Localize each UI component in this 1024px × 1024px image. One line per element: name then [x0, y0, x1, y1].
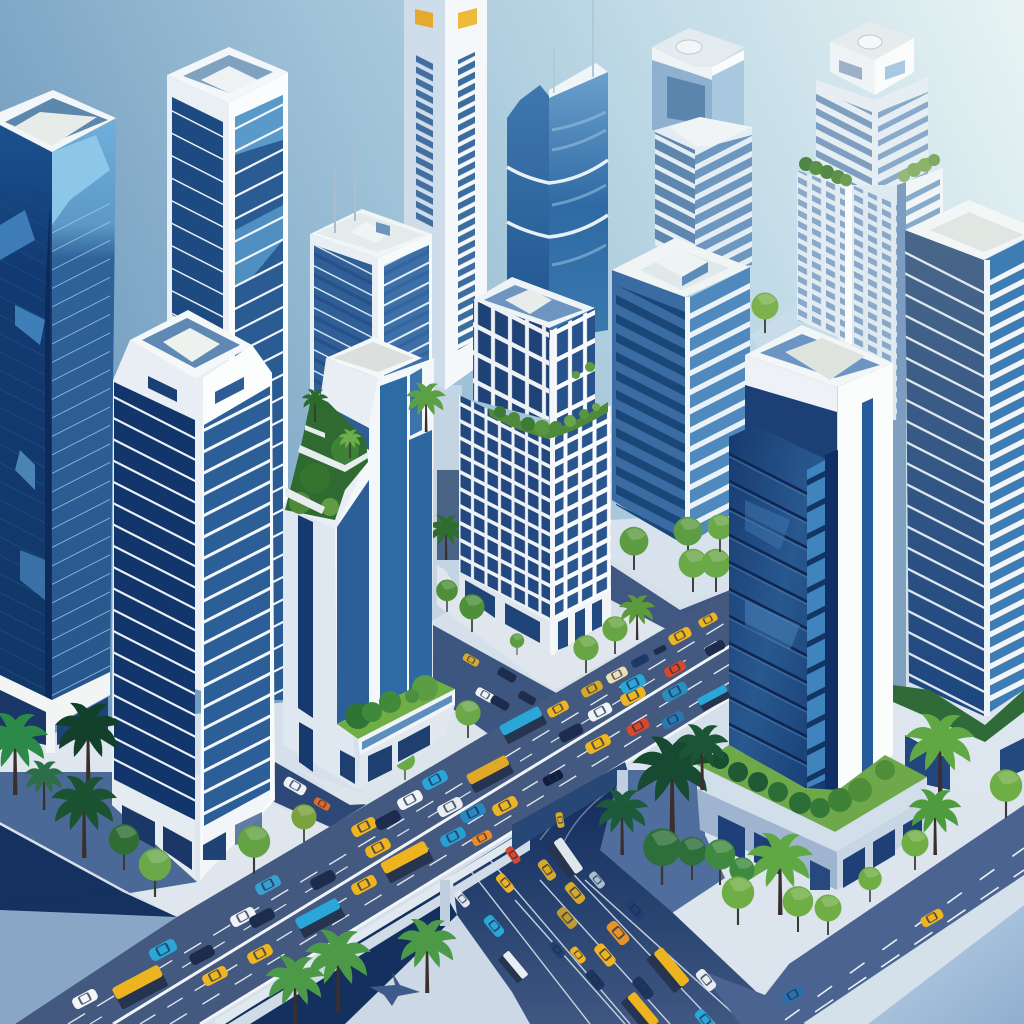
- tower: front left striped tower: [112, 310, 275, 880]
- lower road under bridge: [452, 770, 805, 1024]
- plaza trees behind buildings: [428, 292, 778, 640]
- highway vehicles: [71, 611, 731, 1010]
- tower: octagonal back tower: [652, 28, 752, 270]
- tower: rear antenna tower: [310, 137, 432, 420]
- tower: striped center-right tower: [612, 238, 750, 545]
- right plaza: [600, 690, 1024, 995]
- elevated highway deck: [15, 590, 730, 1024]
- water and lower ground: [0, 875, 1024, 1024]
- upper gardens: [285, 383, 446, 520]
- ground: plazas, roads and bridge: [0, 305, 1024, 1024]
- bridge pillars: [440, 770, 628, 926]
- roof garden: [488, 362, 608, 439]
- tower: second tall glass tower: [167, 47, 288, 700]
- left plaza: [0, 740, 330, 917]
- tower: far left glass tower: [0, 90, 116, 753]
- tower: right foreground tower with base: [893, 200, 1024, 800]
- tower: far white tower: [404, 0, 487, 390]
- lower road vehicles: [453, 812, 945, 1024]
- side road and island by terrace tower: [270, 512, 730, 827]
- trees around central tower: [395, 580, 628, 780]
- tower: pale right back tower with green wings: [797, 22, 943, 440]
- palms: [0, 703, 975, 1024]
- lower terrace garden: [337, 675, 455, 790]
- tower: central grid tower: [459, 277, 611, 655]
- tower: blue glass curved tower: [507, 0, 608, 340]
- tower: terrace tower with gardens: [283, 337, 455, 790]
- lower right road: [700, 805, 1024, 1024]
- base of right tower: [893, 685, 1024, 800]
- wing gardens: [799, 154, 940, 186]
- tower: front central tower with garden podium: [697, 325, 927, 890]
- triangular plaza: [225, 885, 530, 1024]
- garden podium: [697, 745, 927, 890]
- round trees: [109, 769, 1022, 935]
